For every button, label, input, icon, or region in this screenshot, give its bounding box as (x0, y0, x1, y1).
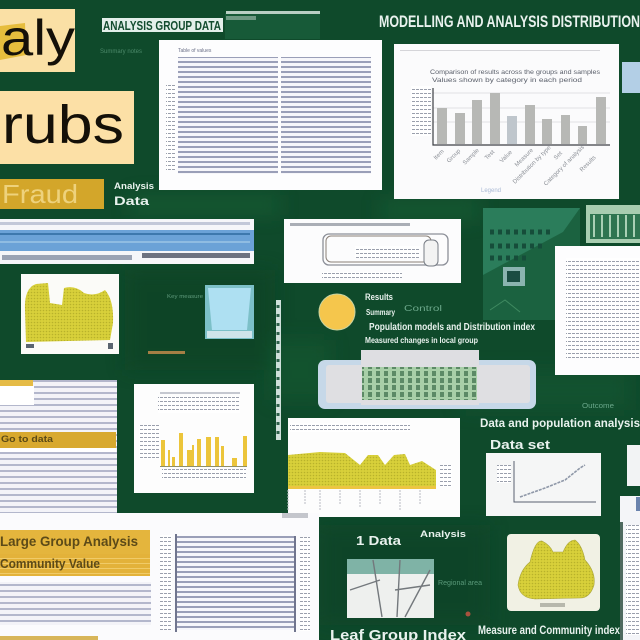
small labels: Analysis (114, 181, 154, 191)
note: rubs heading (0, 91, 134, 164)
panel: bar chart: Measure (514, 147, 535, 168)
panel: yellow shape card (21, 274, 119, 354)
panel: green map (483, 208, 580, 320)
device diagram (318, 350, 536, 409)
panel: bar chart: Category of analysis (543, 145, 586, 187)
text block: center labels: Measured changes in local group (365, 336, 478, 345)
text block: center labels: Control (404, 304, 442, 313)
gold banner: Fraud (2, 179, 78, 209)
panel: document table (159, 40, 382, 190)
gold callout (0, 530, 150, 576)
panel: yellow bar chart (134, 384, 254, 493)
gold callout: Large Group Analysis (0, 533, 138, 549)
text block: center labels: Population models and Distribution index (369, 322, 535, 333)
panel: yellow shape (507, 534, 600, 611)
panel: bar chart: Item (433, 149, 446, 161)
red dot (466, 612, 470, 616)
text block: center labels: Results (365, 292, 393, 302)
small panel (627, 445, 640, 486)
heading: left (100, 18, 223, 55)
text block: bottom center labels: 1 Data (356, 533, 402, 548)
heading: lower right: Outcome (582, 403, 614, 410)
heading: left: ANALYSIS GROUP DATA (103, 18, 221, 33)
panel: document table: Table of values (178, 48, 212, 54)
panel: large bottom document (0, 513, 319, 640)
note: aly heading: aly (1, 10, 75, 66)
panel: line chart (486, 453, 601, 516)
panel: bar chart: Legend (481, 188, 501, 194)
heading: left: Summary notes (100, 49, 142, 55)
panel: bar chart: Set (553, 151, 564, 161)
panel: bar chart: Value (499, 149, 514, 164)
panel: bar chart (394, 44, 619, 199)
panel: area chart (288, 418, 460, 517)
orange line (148, 351, 185, 354)
gold banner (0, 179, 104, 209)
text block: bottom center labels: Analysis (420, 529, 466, 539)
panel: blue table (0, 219, 254, 264)
panel: bar chart: Distribution by type (512, 145, 553, 185)
panel: right strip document (620, 496, 640, 640)
note: rubs heading: rubs (2, 95, 124, 155)
yellow bars (161, 433, 247, 466)
panel: bar chart: Group (446, 148, 463, 164)
small labels (114, 181, 154, 208)
small caption: Key measure (167, 294, 203, 300)
light blue patch (622, 62, 640, 93)
green table (362, 367, 477, 400)
icon: yellow circle (319, 294, 355, 330)
gold callout: Community Value (0, 556, 100, 571)
text block: bottom center labels (356, 529, 482, 587)
text block: bottom headings (330, 623, 620, 640)
text block: bottom center labels: Regional area (438, 580, 482, 587)
icon: blue square (205, 285, 254, 339)
panel: right document (555, 246, 640, 375)
heading: lower right (480, 403, 640, 452)
panel: left stacked document: Go to data (1, 434, 54, 444)
panel: bar chart: Comparison of results across the groups and samples (430, 70, 600, 76)
heading: lower right: Data set (490, 437, 551, 452)
text block: center labels: Summary (366, 308, 395, 317)
bars (437, 93, 606, 144)
panel: map (347, 559, 434, 618)
panel: bar chart: Sample (462, 147, 481, 166)
panel: bar chart: Test (484, 149, 496, 161)
top strip (225, 11, 320, 39)
panel: rounded diagram (284, 219, 461, 283)
text block: center labels (365, 292, 535, 345)
vertical strip (276, 300, 281, 440)
panel: bar chart: Results (579, 155, 598, 173)
small labels: Data (114, 194, 149, 208)
panel: left stacked document (0, 380, 117, 513)
panel: bar chart: Values shown by category in each period (432, 78, 582, 84)
small green picture (586, 205, 640, 243)
